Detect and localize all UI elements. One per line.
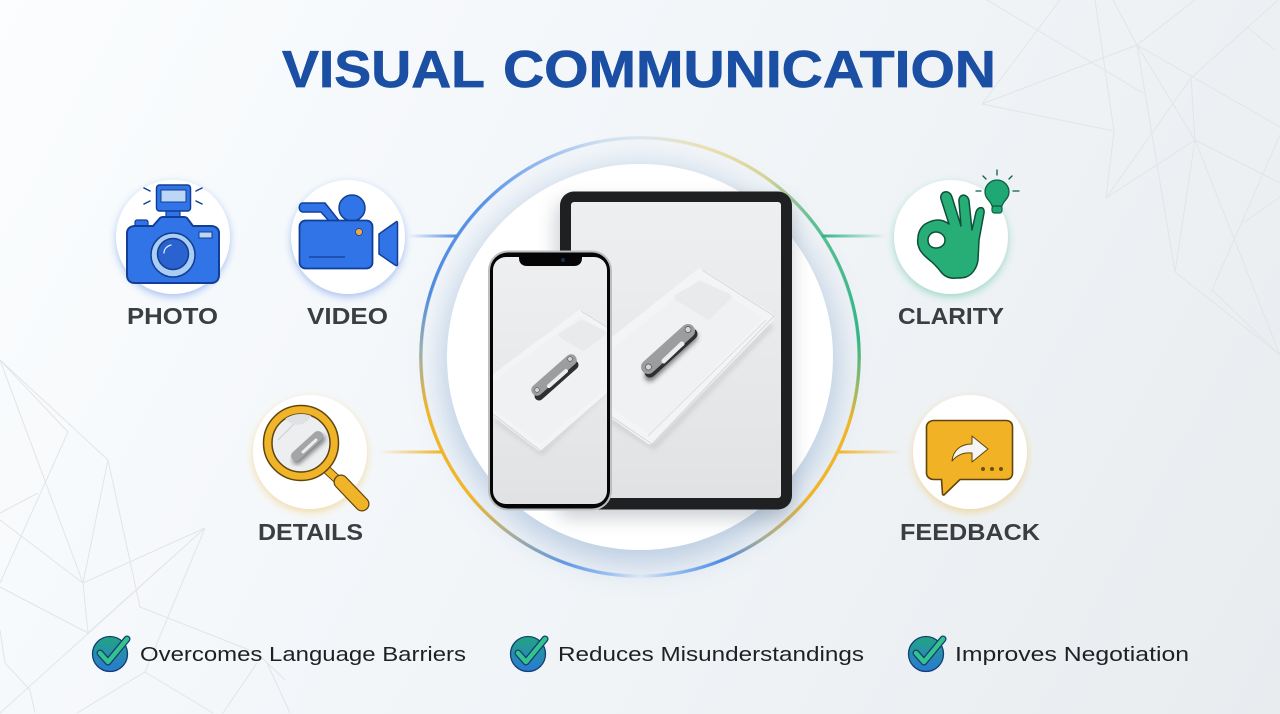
tablet (560, 192, 792, 510)
title: VISUAL (282, 41, 485, 99)
connector: details to ring (378, 450, 442, 454)
label: video: VIDEO (307, 303, 388, 329)
label: photo: PHOTO (127, 303, 218, 329)
connector: feedback to ring (838, 450, 902, 454)
icon: ok hand with light bulb (894, 170, 1019, 294)
icon: light bulb (976, 170, 1019, 213)
icon: check badge 2 (510, 636, 546, 672)
label: details: DETAILS (258, 519, 363, 545)
icon: feedback speech bubble (913, 395, 1027, 509)
benefit: overcomes language barriers: Overcomes Language Barriers (140, 643, 466, 666)
label: feedback: FEEDBACK (900, 519, 1040, 545)
benefit: reduces misunderstandings: Reduces Misunderstandings (558, 643, 864, 666)
icon: check badge 1 (92, 636, 128, 672)
title (282, 41, 996, 99)
benefit: improves negotiation: Improves Negotiation (955, 643, 1189, 666)
connector: video to ring (408, 234, 458, 238)
benefit: improves negotiation (908, 636, 1189, 672)
icon: photo camera (116, 180, 230, 294)
phone (488, 250, 612, 510)
benefit: overcomes language barriers (92, 636, 466, 672)
icon: check badge 3 (908, 636, 944, 672)
devices: tablet and phone (468, 192, 792, 518)
title: COMMUNICATION (503, 41, 996, 99)
connector: clarity to ring (822, 234, 886, 238)
icon: video camera (291, 180, 405, 294)
benefit: reduces misunderstandings (510, 636, 864, 672)
label: clarity: CLARITY (898, 303, 1004, 329)
icon: magnifier (253, 395, 367, 509)
